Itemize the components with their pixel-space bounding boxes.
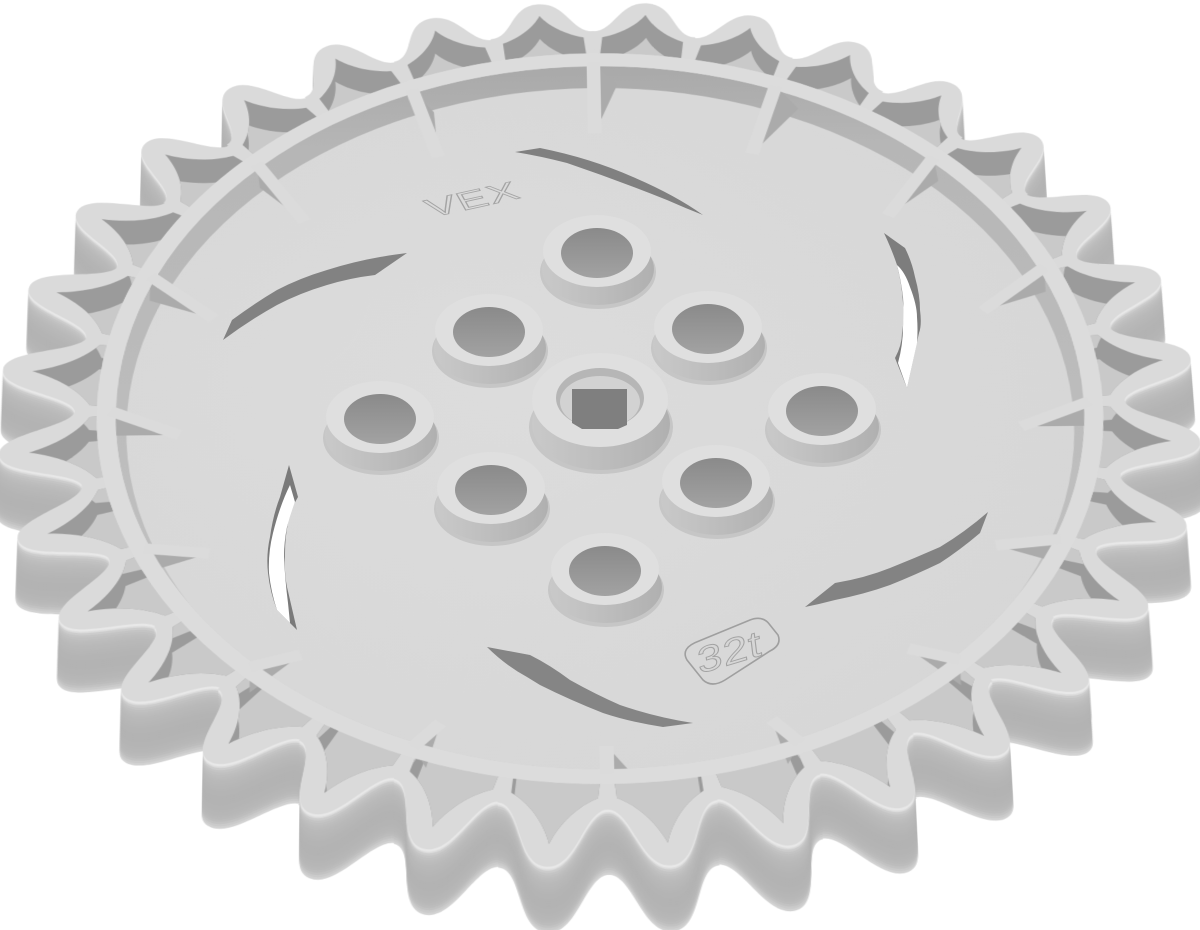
slot: upper left bbox=[223, 253, 407, 340]
VEX logo engraving: VEX bbox=[415, 177, 532, 222]
boss: upper left bbox=[432, 294, 548, 388]
boss: bottom bbox=[548, 533, 664, 627]
slot: lower right bbox=[805, 512, 988, 607]
boss: far left bbox=[323, 381, 439, 475]
recessed plate bbox=[117, 84, 1097, 782]
boss: lower right bbox=[659, 445, 775, 539]
rim inner wall bbox=[106, 62, 1107, 774]
boss: top bbox=[540, 215, 656, 309]
rim top ring bbox=[96, 55, 1118, 782]
centre boss with square bore bbox=[529, 353, 673, 474]
boss: far right bbox=[765, 373, 881, 467]
boss: lower left bbox=[434, 452, 550, 546]
slot: right bbox=[884, 233, 921, 388]
slot: bottom bbox=[487, 647, 693, 727]
spoke fin top strips bbox=[100, 58, 1114, 779]
rim disc bbox=[86, 49, 1128, 789]
boss: upper right bbox=[651, 291, 767, 385]
32t badge: 32t bbox=[695, 623, 764, 682]
slot: lower left bbox=[267, 465, 298, 630]
slot: top bbox=[515, 148, 703, 215]
tooth pockets, lighter floor bbox=[66, 38, 1134, 843]
spoke fin shadows bbox=[100, 58, 1114, 779]
32t badge bbox=[685, 618, 779, 684]
